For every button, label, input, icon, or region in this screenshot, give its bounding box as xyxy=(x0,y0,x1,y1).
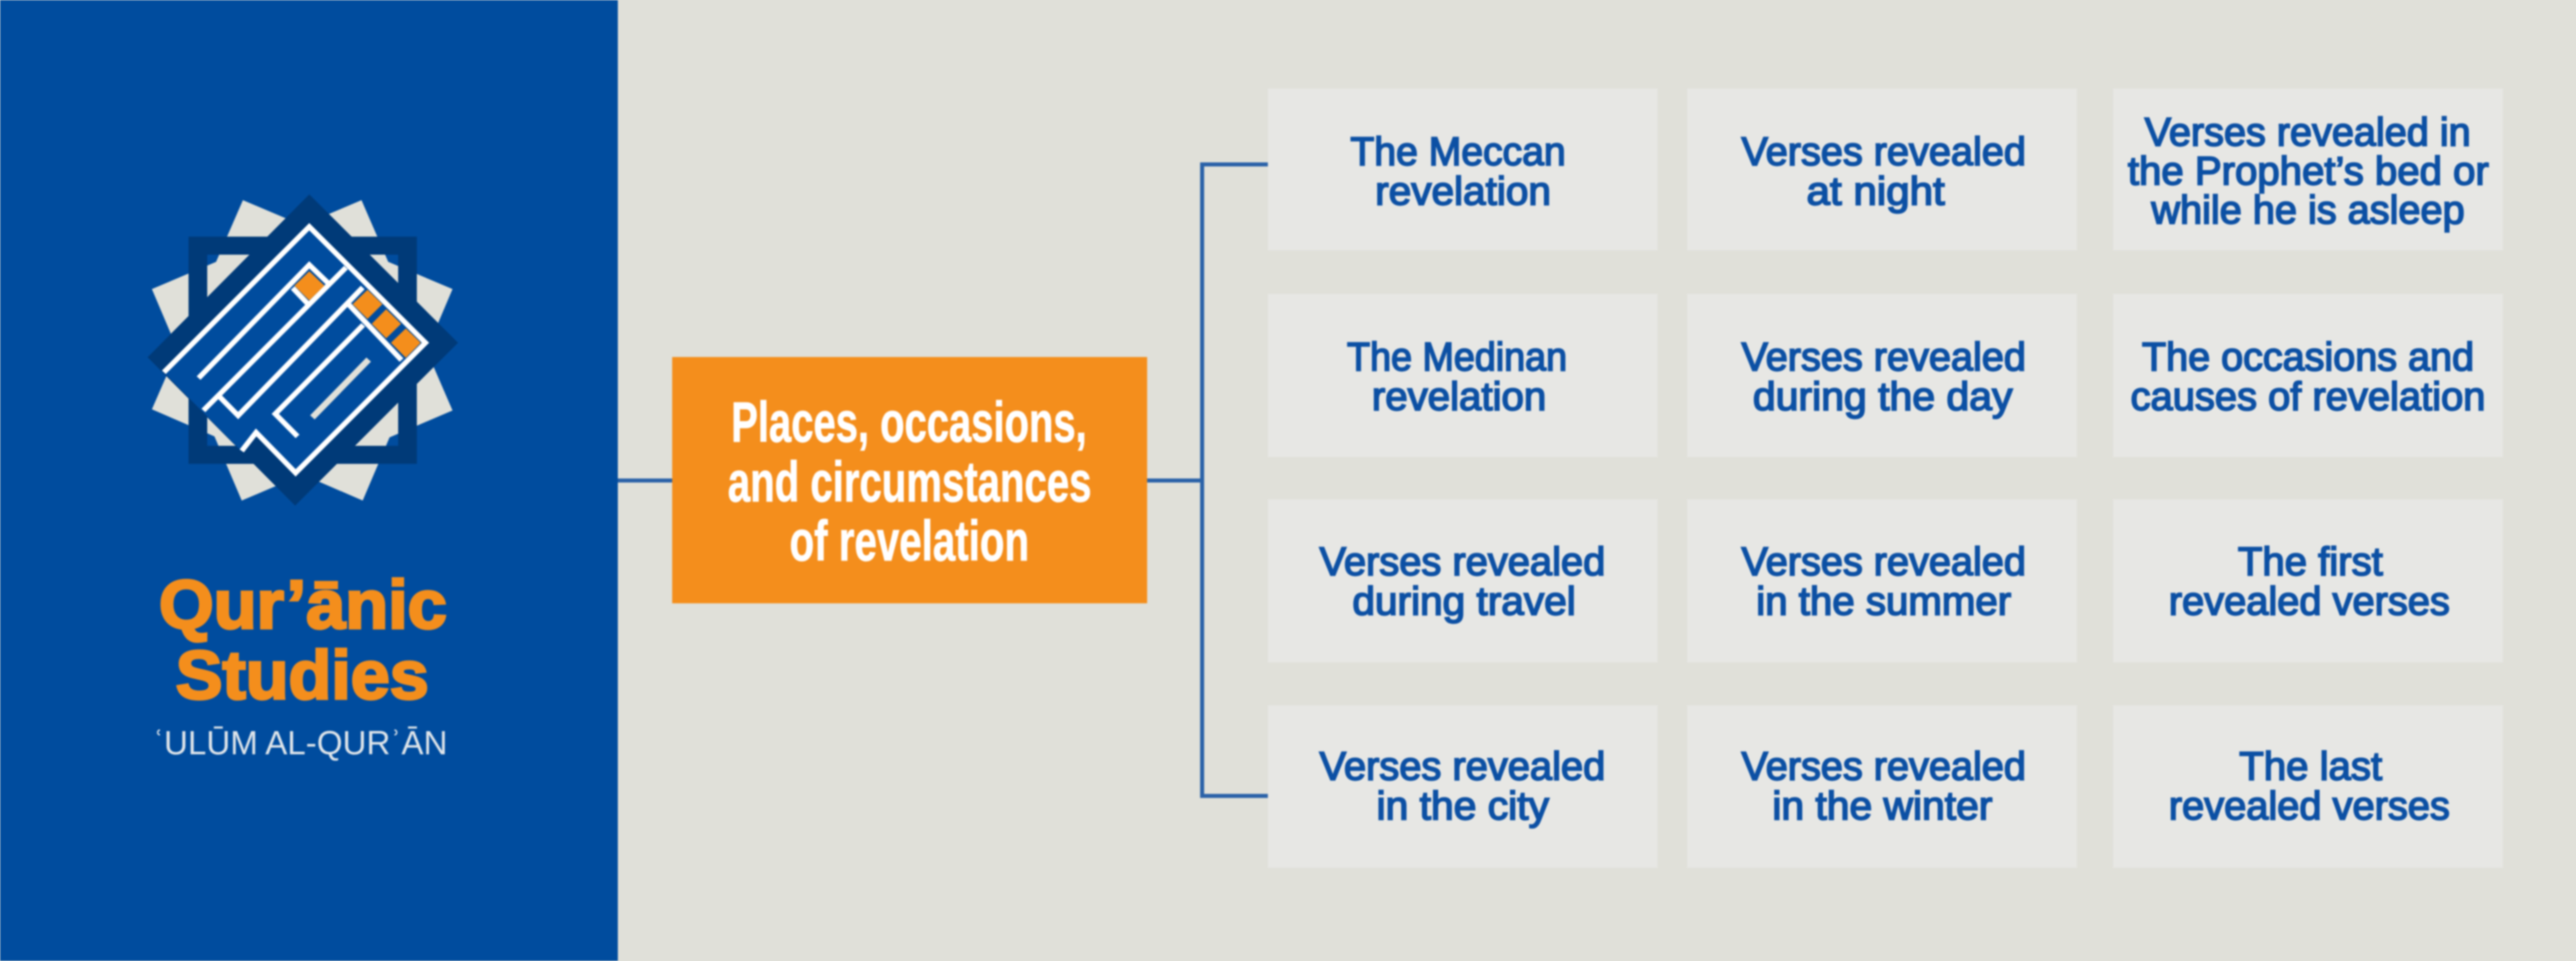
card: Verses revealed in the summer: in the summer xyxy=(1756,579,2011,623)
card: Verses revealed in the Prophet's bed: the Prophet’s bed or xyxy=(2128,149,2489,193)
card: Verses revealed during the day: Verses revealed xyxy=(1741,335,2026,379)
connector lines xyxy=(618,164,1268,796)
icon: Qur'anic Studies logo xyxy=(148,195,458,506)
card: The Meccan revelation: revelation xyxy=(1375,169,1551,213)
card: Verses revealed during travel xyxy=(1268,499,1658,662)
card: Verses revealed in the winter: Verses revealed xyxy=(1741,744,2026,789)
panel: blue sidebar xyxy=(0,0,618,961)
central box: places, occasions, and circumstances xyxy=(672,357,1147,603)
card: Verses revealed in the Prophet's bed: Verses revealed in xyxy=(2145,110,2471,154)
card: Verses revealed in the Prophet's bed: while he is asleep xyxy=(2151,188,2465,232)
card: Verses revealed during the day: during the day xyxy=(1753,374,2013,419)
card: The Meccan revelation xyxy=(1268,89,1658,250)
title: Qur'anic Studies: Qur’ānic xyxy=(159,566,447,643)
card: The Medinan revelation xyxy=(1268,294,1658,457)
card: Verses revealed in the summer xyxy=(1687,499,2077,662)
card: The Medinan revelation: revelation xyxy=(1372,374,1546,419)
card: Verses revealed at night xyxy=(1687,89,2077,250)
title: Qur'anic Studies xyxy=(159,566,447,713)
card: The first revealed verses: The first xyxy=(2238,540,2383,584)
card: The first revealed verses: revealed verses xyxy=(2169,579,2450,623)
card: The occasions and causes of revelation: causes of revelation xyxy=(2131,374,2485,419)
card: Verses revealed in the city: in the city xyxy=(1377,784,1550,828)
card: Verses revealed in the Prophet's bed xyxy=(2113,89,2503,250)
card: The last revealed verses xyxy=(2113,705,2503,868)
card: The Medinan revelation: The Medinan xyxy=(1347,335,1567,379)
card: Verses revealed in the winter: in the winter xyxy=(1772,784,1992,828)
central box: places, occasions, and circumstances: of revelation xyxy=(790,509,1029,572)
card: The Meccan revelation: The Meccan xyxy=(1350,130,1566,174)
central box: places, occasions, and circumstances: Places, occasions, xyxy=(731,391,1087,454)
card: Verses revealed during travel: Verses revealed xyxy=(1320,540,1605,584)
card: Verses revealed in the winter xyxy=(1687,705,2077,868)
card: Verses revealed in the summer: Verses revealed xyxy=(1741,540,2026,584)
card: Verses revealed during travel: during travel xyxy=(1352,579,1576,623)
card: The occasions and causes of revelation xyxy=(2113,294,2503,457)
card: The last revealed verses: revealed verses xyxy=(2169,784,2450,828)
card: Verses revealed in the city xyxy=(1268,705,1658,868)
card: Verses revealed at night: Verses revealed xyxy=(1741,130,2026,174)
card: The occasions and causes of revelation: The occasions and xyxy=(2142,335,2474,379)
card: The last revealed verses: The last xyxy=(2239,744,2382,789)
subtitle: Ulum al-Quran: ʿULŪM AL-QURʾĀN xyxy=(153,724,447,762)
card: Verses revealed during the day xyxy=(1687,294,2077,457)
card: Verses revealed in the city: Verses revealed xyxy=(1320,744,1605,789)
title: Qur'anic Studies: Studies xyxy=(176,637,429,713)
card: Verses revealed at night: at night xyxy=(1807,169,1945,213)
card: The first revealed verses xyxy=(2113,499,2503,662)
central box: places, occasions, and circumstances: and circumstances xyxy=(728,450,1091,513)
